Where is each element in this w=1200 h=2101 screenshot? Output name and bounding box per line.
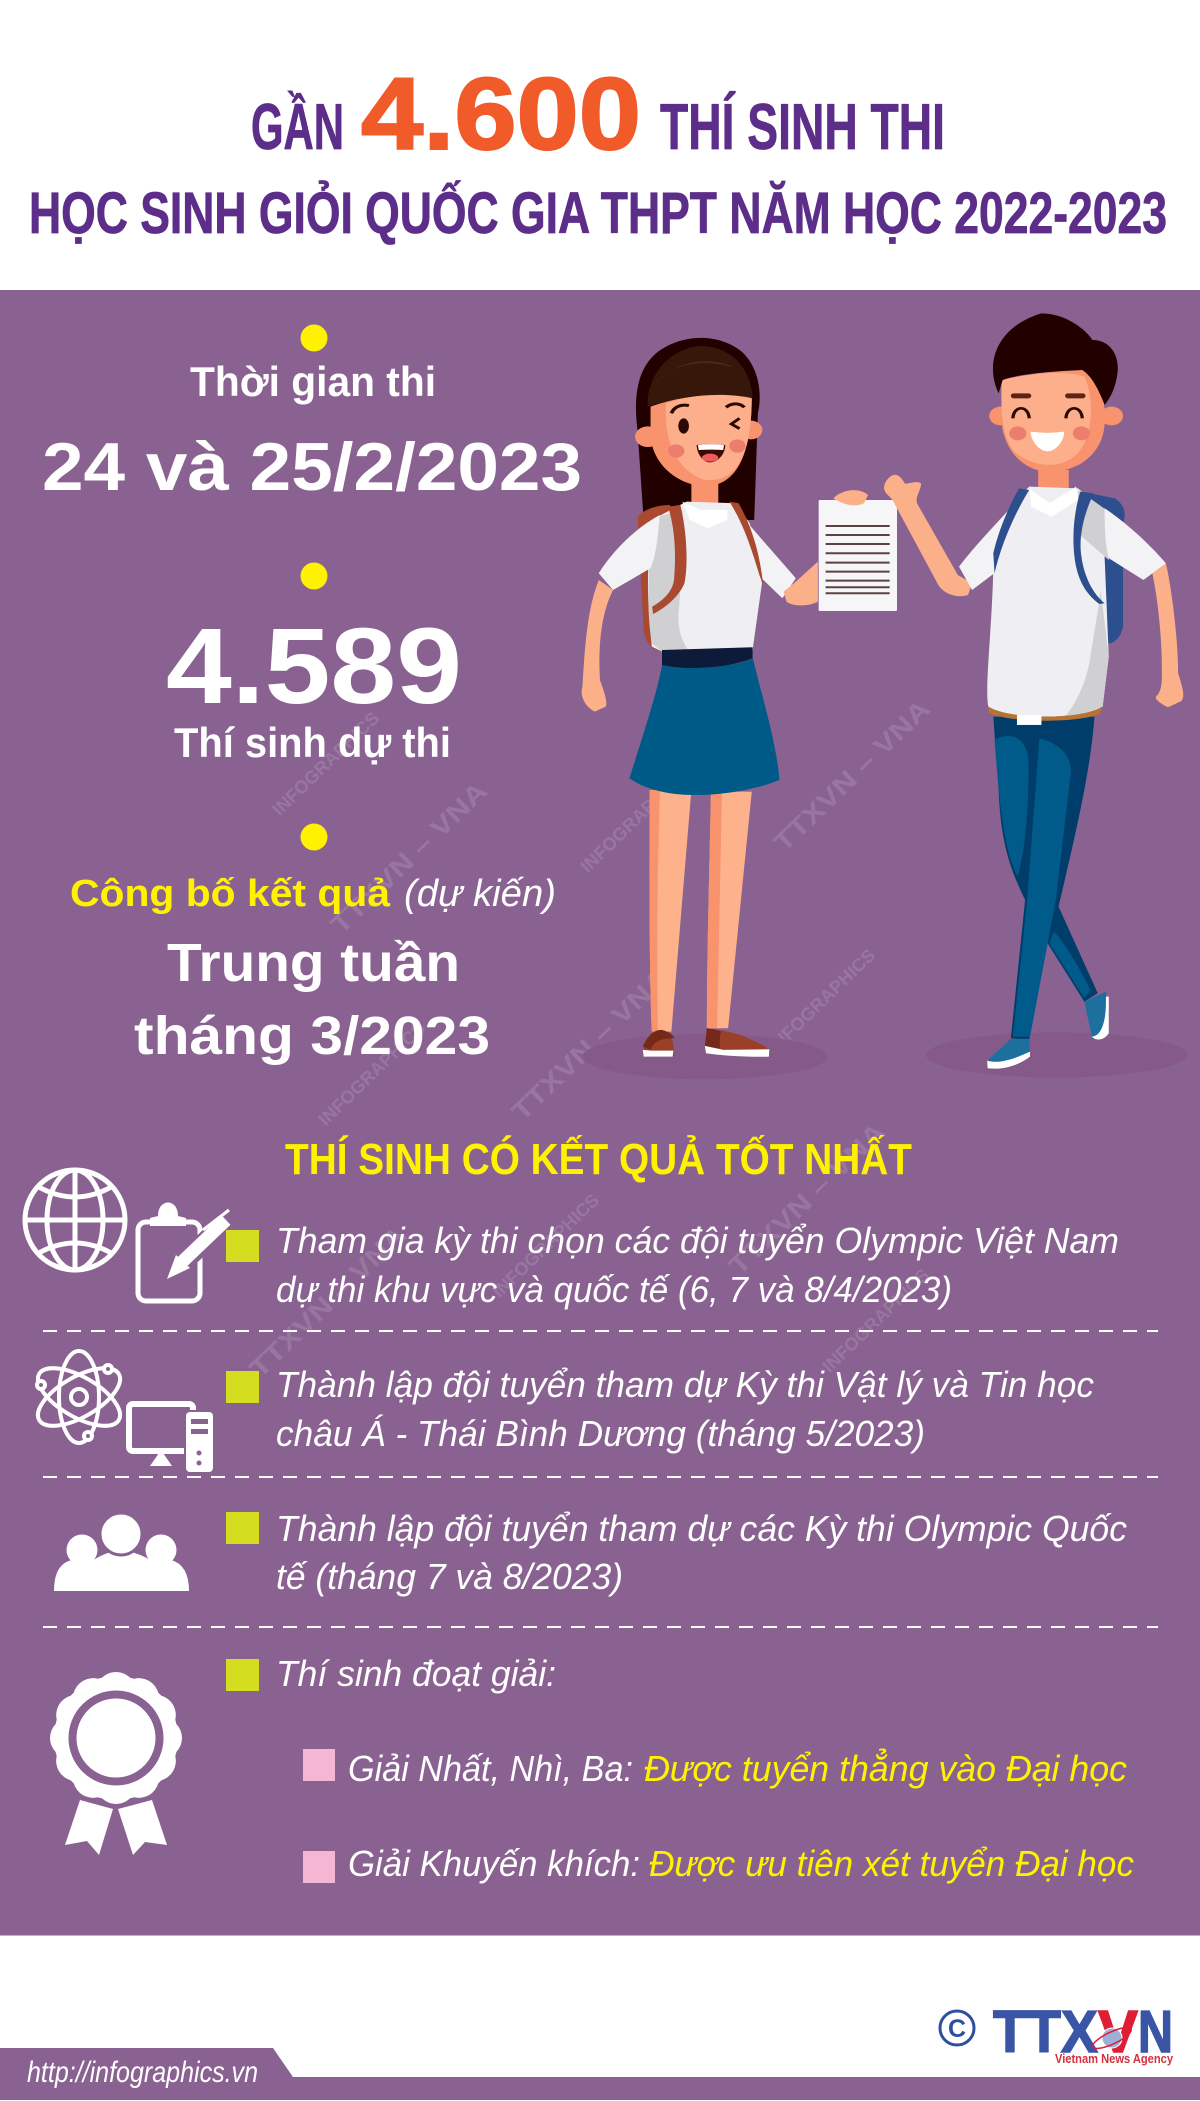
row 4 text: prizes: Được ưu tiên xét tuyển Đại học [649,1843,1134,1884]
row 1 text [226,1220,1119,1310]
watermarks: INFOGRAPHICS [489,1190,603,1302]
logo: TTXVN: N [1138,1999,1173,2065]
row 4 text: prizes [226,1653,1134,1884]
row 2 text [226,1364,1094,1454]
block: results announcement: tháng 3/2023 [134,1006,490,1066]
logo: TTXVN: TTX [993,1999,1098,2065]
row 1: globe and clipboard icons [25,1170,229,1301]
row 1 text: dự thi khu vực và quốc tế (6, 7 và 8/4/2023) [276,1269,952,1310]
watermarks: INFOGRAPHICS [269,708,383,820]
block: candidates count: 4.589 [166,605,462,726]
row 2 text: Thành lập đội tuyển tham dự Kỳ thi Vật lý và Tin học [276,1364,1094,1405]
block: exam date: Thời gian thi [190,358,436,405]
row 4 text: prizes: Giải Nhất, Nhì, Ba: [348,1748,633,1789]
row 2 text: châu Á - Thái Bình Dương (tháng 5/2023) [276,1413,925,1454]
floor shadows [582,1032,1187,1079]
watermarks: INFOGRAPHICS [765,945,879,1057]
icon: people [54,1513,189,1591]
icon: clipboard and pen [138,1202,229,1301]
row 2: atom and computer icons [29,1351,215,1474]
watermarks: INFOGRAPHICS [577,765,691,877]
logo: TTXVN: Vietnam News Agency [1055,2051,1174,2066]
block: results announcement: Trung tuần [167,933,460,993]
watermarks: TTXVN – VNA [325,775,493,940]
watermarks [244,693,936,1384]
icon: computer [129,1404,215,1474]
icon: atom [29,1351,129,1443]
heading: best results: THÍ SINH CÓ KẾT QUẢ TỐT NHẤT [285,1133,912,1184]
row 3 text [226,1508,1127,1597]
footer bar [0,2048,1200,2100]
watermarks: INFOGRAPHICS [819,1265,933,1377]
watermarks: INFOGRAPHICS [315,1018,429,1130]
block: exam date [42,324,582,505]
panel: purple background [0,290,1200,1936]
row 3 text: tế (tháng 7 và 8/2023) [276,1556,623,1597]
girl [582,338,818,1057]
title [29,57,1167,246]
block: results announcement: (dự kiến) [404,873,556,915]
watermarks: TTXVN – VNA [723,1116,891,1281]
watermarks: TTXVN – VNA [506,962,674,1127]
block: candidates count [166,562,462,766]
watermarks: TTXVN – VNA [768,693,936,858]
row 1 text: Tham gia kỳ thi chọn các đội tuyển Olympic Việt Nam [276,1220,1119,1261]
paper held by students [819,490,897,611]
footer bar: http://infographics.vn [27,2056,258,2089]
row 4 text: prizes: Thí sinh đoạt giải: [276,1653,556,1694]
row 4 text: prizes: Giải Khuyến khích: [348,1843,640,1884]
title: THÍ SINH THI [660,90,945,163]
title: GẦN [251,90,344,163]
block: results announcement: Công bố kết quả [70,873,391,915]
icon: globe [25,1170,125,1270]
illustration: two students [582,313,1187,1079]
icon: award rosette [49,1671,183,1855]
logo: TTXVN [993,1999,1174,2066]
block: results announcement [70,824,556,1066]
row 4 text: prizes: Được tuyển thẳng vào Đại học [644,1747,1127,1789]
watermarks: TTXVN – VNA [244,1219,412,1384]
boy [884,313,1183,1069]
logo: TTXVN: V [1098,1999,1138,2065]
block: exam date: 24 và 25/2/2023 [42,429,582,505]
copyright symbol [940,2011,974,2045]
copyright symbol: C [948,2015,966,2043]
row 3 text: Thành lập đội tuyển tham dự các Kỳ thi Olympic Quốc [276,1508,1127,1549]
title: 4.600 [361,57,641,171]
block: candidates count: Thí sinh dự thi [174,719,451,766]
